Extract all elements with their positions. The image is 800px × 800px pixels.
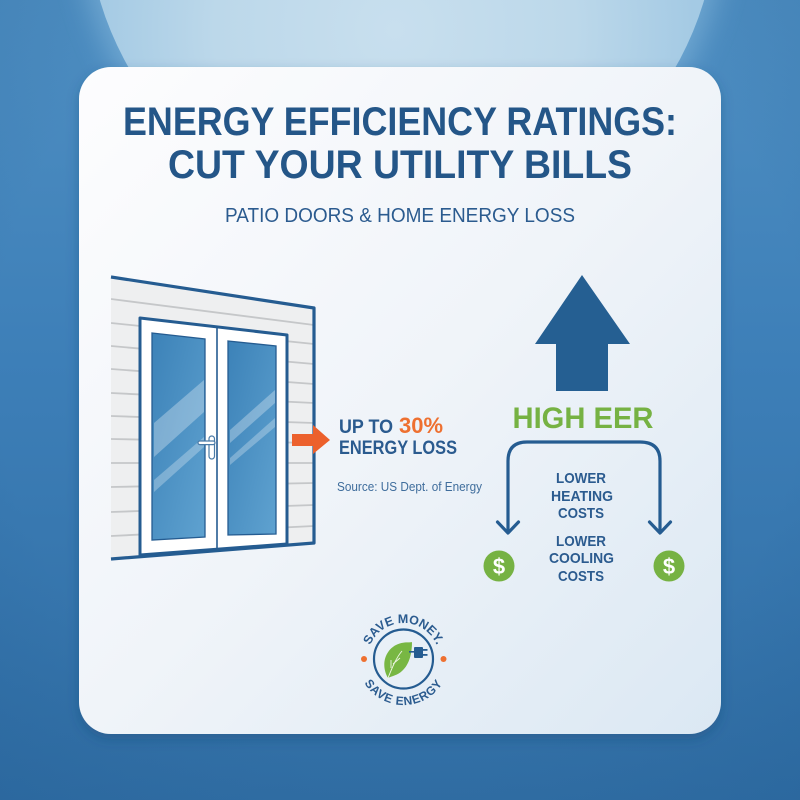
source note: Source: US Dept. of Energy [337, 479, 482, 494]
arrow: energy loss [292, 425, 330, 454]
text: lower cooling costs: COSTS [558, 568, 604, 585]
text: lower heating costs [551, 470, 613, 522]
title [123, 100, 677, 187]
callout: energy loss: UP TO [339, 417, 393, 438]
label: high EER: HIGH EER [512, 402, 654, 435]
arrow: split bracket [498, 442, 670, 533]
badge: save money save energy: SAVE MONEY. [364, 614, 444, 644]
badge: save money save energy: SAVE ENERGY [365, 679, 440, 706]
panel: main card [76, 65, 724, 740]
text: lower heating costs: LOWER [556, 470, 606, 487]
title: ENERGY EFFICIENCY RATINGS: [123, 100, 677, 144]
text: lower cooling costs: LOWER [556, 533, 606, 550]
callout: energy loss: 30% [399, 413, 443, 438]
right glass pane [228, 341, 276, 535]
subtitle: PATIO DOORS & HOME ENERGY LOSS [225, 205, 575, 227]
text: lower heating costs: HEATING [551, 488, 613, 505]
title: CUT YOUR UTILITY BILLS [168, 143, 632, 187]
text: lower cooling costs: COOLING [549, 550, 614, 567]
door frame [140, 318, 287, 555]
arrow: up [535, 275, 630, 391]
left glass pane [152, 333, 205, 540]
icon: dollar left: $ [493, 554, 505, 579]
callout: energy loss [339, 413, 457, 459]
icon: dollar left [484, 550, 514, 582]
text: lower cooling costs [549, 533, 614, 585]
text: lower heating costs: COSTS [558, 505, 604, 522]
icon: door handle [198, 436, 215, 459]
badge: save money save energy [361, 614, 446, 706]
door center mullion [216, 328, 218, 549]
icon: plug [409, 647, 428, 658]
wall siding [111, 277, 314, 559]
icon: dollar right: $ [663, 554, 675, 579]
icon: dollar right [654, 550, 684, 582]
icon: leaf [384, 642, 412, 678]
illustration: patio door on wall [111, 277, 314, 559]
callout: energy loss: ENERGY LOSS [339, 438, 457, 459]
